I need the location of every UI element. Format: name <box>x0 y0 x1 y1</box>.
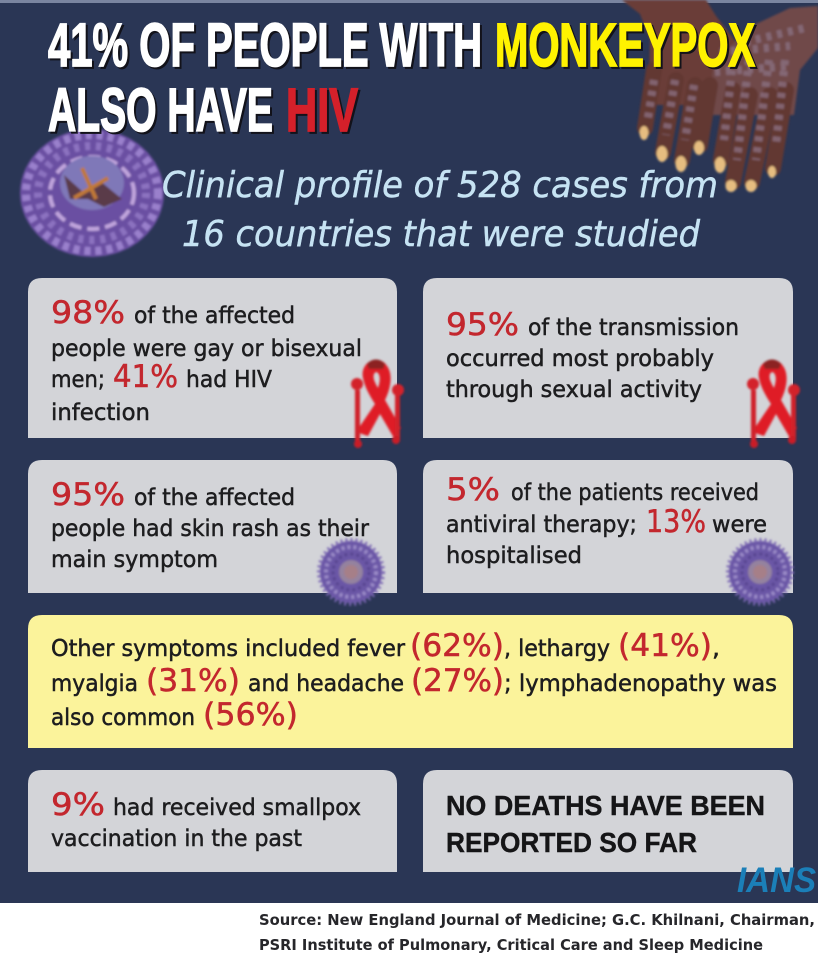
panel: other symptoms: Other symptoms included fever <box>51 636 406 662</box>
image: large virus <box>20 129 164 257</box>
title: HIV <box>286 76 358 144</box>
subtitle: Clinical profile of 528 cases from <box>162 165 718 206</box>
panel: transmission: through sexual activity <box>446 377 702 403</box>
icon: small virus <box>728 540 792 604</box>
source credit <box>259 911 815 954</box>
panel: skin rash <box>28 460 397 593</box>
panel: other symptoms: also common <box>51 705 195 731</box>
panel: sexual orientation and HIV: had HIV <box>186 367 272 393</box>
panel: skin rash: of the affected <box>134 485 295 511</box>
panel: other symptoms: (41%) <box>618 628 712 664</box>
top edge strip <box>0 0 818 3</box>
panel: other symptoms <box>28 615 793 748</box>
panel: therapy and hospitalisation <box>423 460 793 593</box>
panel: smallpox vaccination <box>28 770 397 872</box>
panel: other symptoms: , lethargy <box>504 636 610 662</box>
panel: therapy and hospitalisation: 13% <box>646 504 706 540</box>
panel: therapy and hospitalisation: were <box>712 512 767 538</box>
title <box>48 11 755 144</box>
panel: sexual orientation and HIV: men; <box>51 367 105 393</box>
panel: sexual orientation and HIV: of the affected <box>134 303 295 329</box>
subtitle <box>162 165 718 255</box>
panel: other symptoms: (56%) <box>203 697 298 733</box>
panel: other symptoms: (31%) <box>146 663 240 699</box>
source credit: PSRI Institute of Pulmonary, Critical Care and Sleep Medicine <box>259 936 763 954</box>
source credit: Source: New England Journal of Medicine; G.C. Khilnani, Chairman, <box>259 911 815 929</box>
panel: therapy and hospitalisation: of the patients received <box>511 480 759 506</box>
panel: smallpox vaccination: had received smallpox <box>113 795 361 821</box>
panel: no deaths <box>423 770 793 872</box>
panel: skin rash: 95% <box>51 477 125 513</box>
panel: smallpox vaccination: vaccination in the past <box>51 826 302 852</box>
panel: other symptoms: myalgia <box>51 671 138 697</box>
title: ALSO HAVE <box>48 76 273 144</box>
panel: sexual orientation and HIV <box>28 278 397 438</box>
panel: therapy and hospitalisation: 5% <box>446 472 500 508</box>
panel: other symptoms: (27%) <box>411 663 504 699</box>
subtitle: 16 countries that were studied <box>182 214 701 255</box>
panel: sexual orientation and HIV: 41% <box>113 359 178 395</box>
panel: other symptoms: and headache <box>248 671 404 697</box>
icon: small virus <box>319 540 383 604</box>
panel: smallpox vaccination: 9% <box>51 787 105 823</box>
panel: no deaths: NO DEATHS HAVE BEEN <box>446 790 765 821</box>
icon: red ribbon <box>747 360 800 448</box>
panel: skin rash: people had skin rash as their <box>51 516 370 542</box>
panel: other symptoms: (62%) <box>410 628 504 664</box>
panel: no deaths: REPORTED SO FAR <box>446 827 697 858</box>
icon: red ribbon <box>351 360 404 448</box>
panel: therapy and hospitalisation: antiviral therapy; <box>446 512 637 538</box>
panel: therapy and hospitalisation: hospitalised <box>446 543 582 569</box>
panel: transmission: occurred most probably <box>446 346 714 372</box>
title: 41% OF PEOPLE WITH <box>48 11 482 79</box>
panel: sexual orientation and HIV: 98% <box>51 295 125 331</box>
panel: sexual orientation and HIV: people were gay or bisexual <box>51 336 362 362</box>
panel: sexual orientation and HIV: infection <box>51 400 150 426</box>
panel: skin rash: main symptom <box>51 547 218 573</box>
image: hands with monkeypox rash <box>622 0 818 192</box>
panel: transmission: of the transmission <box>528 315 739 341</box>
panel: transmission: 95% <box>446 307 519 343</box>
panel: other symptoms: ; lymphadenopathy was <box>504 671 777 697</box>
panel: transmission <box>423 278 793 438</box>
panel: other symptoms: , <box>712 636 720 662</box>
